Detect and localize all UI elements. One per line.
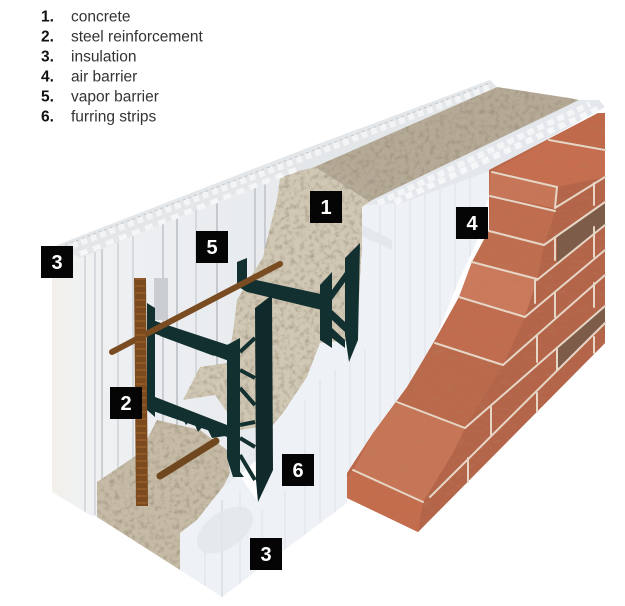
rungs	[240, 338, 255, 480]
stepped brick faces	[347, 173, 557, 532]
front insulation ridge	[365, 100, 605, 205]
brick silhouette base	[347, 113, 605, 532]
rear left furring strip	[147, 303, 155, 417]
legend item 3: insulation	[71, 48, 136, 66]
label 3: front insulation	[250, 538, 282, 570]
legend item 2: steel reinforcement	[71, 28, 204, 46]
label 4: air barrier: 4	[466, 213, 478, 235]
flange teeth	[160, 330, 225, 438]
legend item 4: 4.	[41, 68, 54, 86]
label 2: steel reinforcement	[110, 387, 142, 419]
legend	[41, 8, 204, 126]
label 5: vapor barrier	[196, 231, 228, 263]
legend item 2: 2.	[41, 28, 54, 46]
label 2: steel reinforcement: 2	[120, 393, 132, 415]
mortar joints	[353, 140, 605, 502]
legend item 3	[41, 48, 136, 66]
front insulation panel	[180, 165, 492, 597]
label 4: air barrier	[456, 207, 488, 239]
legend item 1	[41, 8, 130, 26]
upper front flange	[148, 318, 240, 365]
legend item 1: concrete	[71, 8, 130, 26]
label 3: back insulation	[41, 246, 73, 278]
legend item 3: 3.	[41, 48, 54, 66]
concrete core	[97, 87, 579, 570]
legend item 6: furring strips	[71, 108, 157, 126]
legend item 4: air barrier	[71, 68, 137, 86]
centre vertical strip	[227, 338, 244, 477]
rear furring frame	[237, 243, 360, 362]
label 1: concrete: 1	[320, 197, 332, 219]
dark bricks	[557, 202, 605, 371]
legend item 1: 1.	[41, 8, 54, 26]
back insulation ridge	[57, 80, 497, 258]
label 6: furring strips	[282, 454, 314, 486]
label 1: concrete	[310, 191, 342, 223]
wall illustration	[52, 80, 605, 597]
short lower rebar	[160, 441, 216, 476]
concrete base block	[97, 420, 230, 570]
legend item 6: 6.	[41, 108, 54, 126]
lower front flange	[150, 395, 230, 438]
label 6: furring strips: 6	[292, 460, 304, 482]
label 5: vapor barrier: 5	[206, 237, 218, 259]
horizontal rebar	[112, 264, 280, 352]
back insulation panel	[52, 173, 289, 517]
legend item 5: 5.	[41, 88, 54, 106]
brick right face	[418, 150, 605, 532]
label 3: back insulation: 3	[51, 252, 63, 274]
legend item 4	[41, 68, 137, 86]
steel reinforcement and furring strips	[112, 243, 360, 506]
label 3: front insulation: 3	[260, 544, 272, 566]
concrete top surface	[312, 87, 579, 205]
brick wall	[347, 113, 605, 532]
legend item 5: vapor barrier	[71, 88, 159, 106]
vertical rebar	[140, 278, 142, 506]
front vertical strip	[255, 295, 273, 502]
concrete cut face	[183, 165, 372, 430]
brick top surfaces	[494, 113, 605, 187]
